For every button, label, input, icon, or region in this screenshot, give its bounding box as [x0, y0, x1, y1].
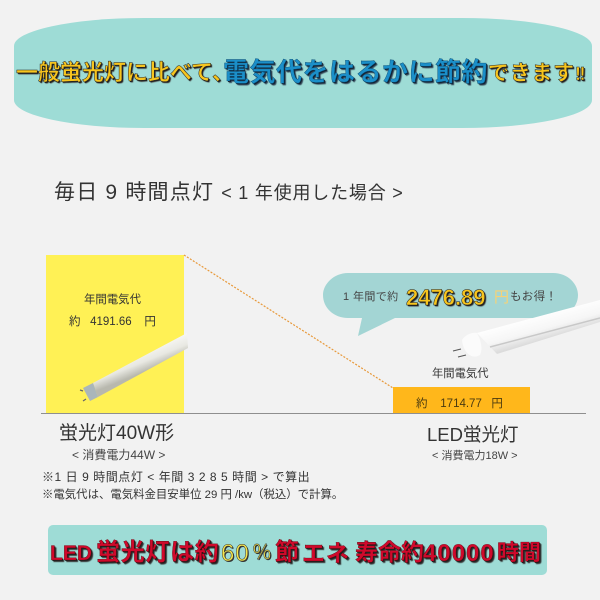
- label: fluorescent power: < 消費電力44W >: [72, 448, 165, 462]
- callout text: 2476.89: [406, 285, 486, 310]
- baseline: [41, 413, 586, 414]
- banner headline: 一般蛍光灯に比べて、: [16, 60, 234, 85]
- bottom banner text: 蛍光灯は約: [96, 539, 220, 566]
- banner headline: 電気代をはるかに節約: [223, 57, 488, 87]
- note: hours: ※1 日 9 時間点灯 < 年間 3 2 8 5 時間 > で算出: [42, 470, 310, 484]
- callout text: もお得！: [510, 291, 557, 303]
- value: fluorescent annual cost: 約 4191.66 円: [69, 316, 156, 328]
- banner headline: !!: [575, 64, 584, 84]
- callout: yearly saving: [323, 273, 578, 336]
- bottom banner text: [50, 539, 542, 567]
- top banner: [14, 18, 592, 128]
- subtitle: daily usage: 毎日 9 時間点灯 < 1 年使用した場合 >: [54, 181, 404, 204]
- callout text: [343, 285, 557, 310]
- label: LED fluorescent: LED蛍光灯: [427, 424, 518, 445]
- note: unit price: ※電気代は、電気料金目安単位 29 円 /kw（税込）で計算。: [42, 489, 343, 501]
- banner headline: できます: [488, 62, 575, 85]
- label: LED power: < 消費電力18W >: [432, 450, 518, 462]
- bottom banner text: 40000: [423, 540, 495, 567]
- bottom banner text: ％: [252, 542, 272, 564]
- yellow bar: fluorescent annual cost: [46, 255, 184, 413]
- bottom banner text: エネ: [302, 540, 350, 566]
- callout text: 円: [494, 289, 509, 306]
- bottom banner text: 時間: [497, 540, 541, 565]
- bottom banner text: 寿命約: [355, 539, 424, 565]
- bottom banner text: 60: [221, 540, 250, 567]
- callout text: 1 年間で約: [343, 291, 399, 303]
- label: fluorescent annual cost: 年間電気代: [84, 294, 141, 306]
- bottom banner text: LED: [50, 542, 92, 565]
- bottom banner: [48, 525, 547, 575]
- value: LED annual cost: 約 1714.77 円: [416, 398, 503, 410]
- label: LED annual cost: 年間電気代: [432, 368, 488, 380]
- bottom banner text: 節: [275, 539, 299, 566]
- label: fluorescent 40W: 蛍光灯40W形: [59, 423, 174, 444]
- orange bar: LED annual cost: [393, 387, 530, 414]
- banner headline: [16, 57, 586, 87]
